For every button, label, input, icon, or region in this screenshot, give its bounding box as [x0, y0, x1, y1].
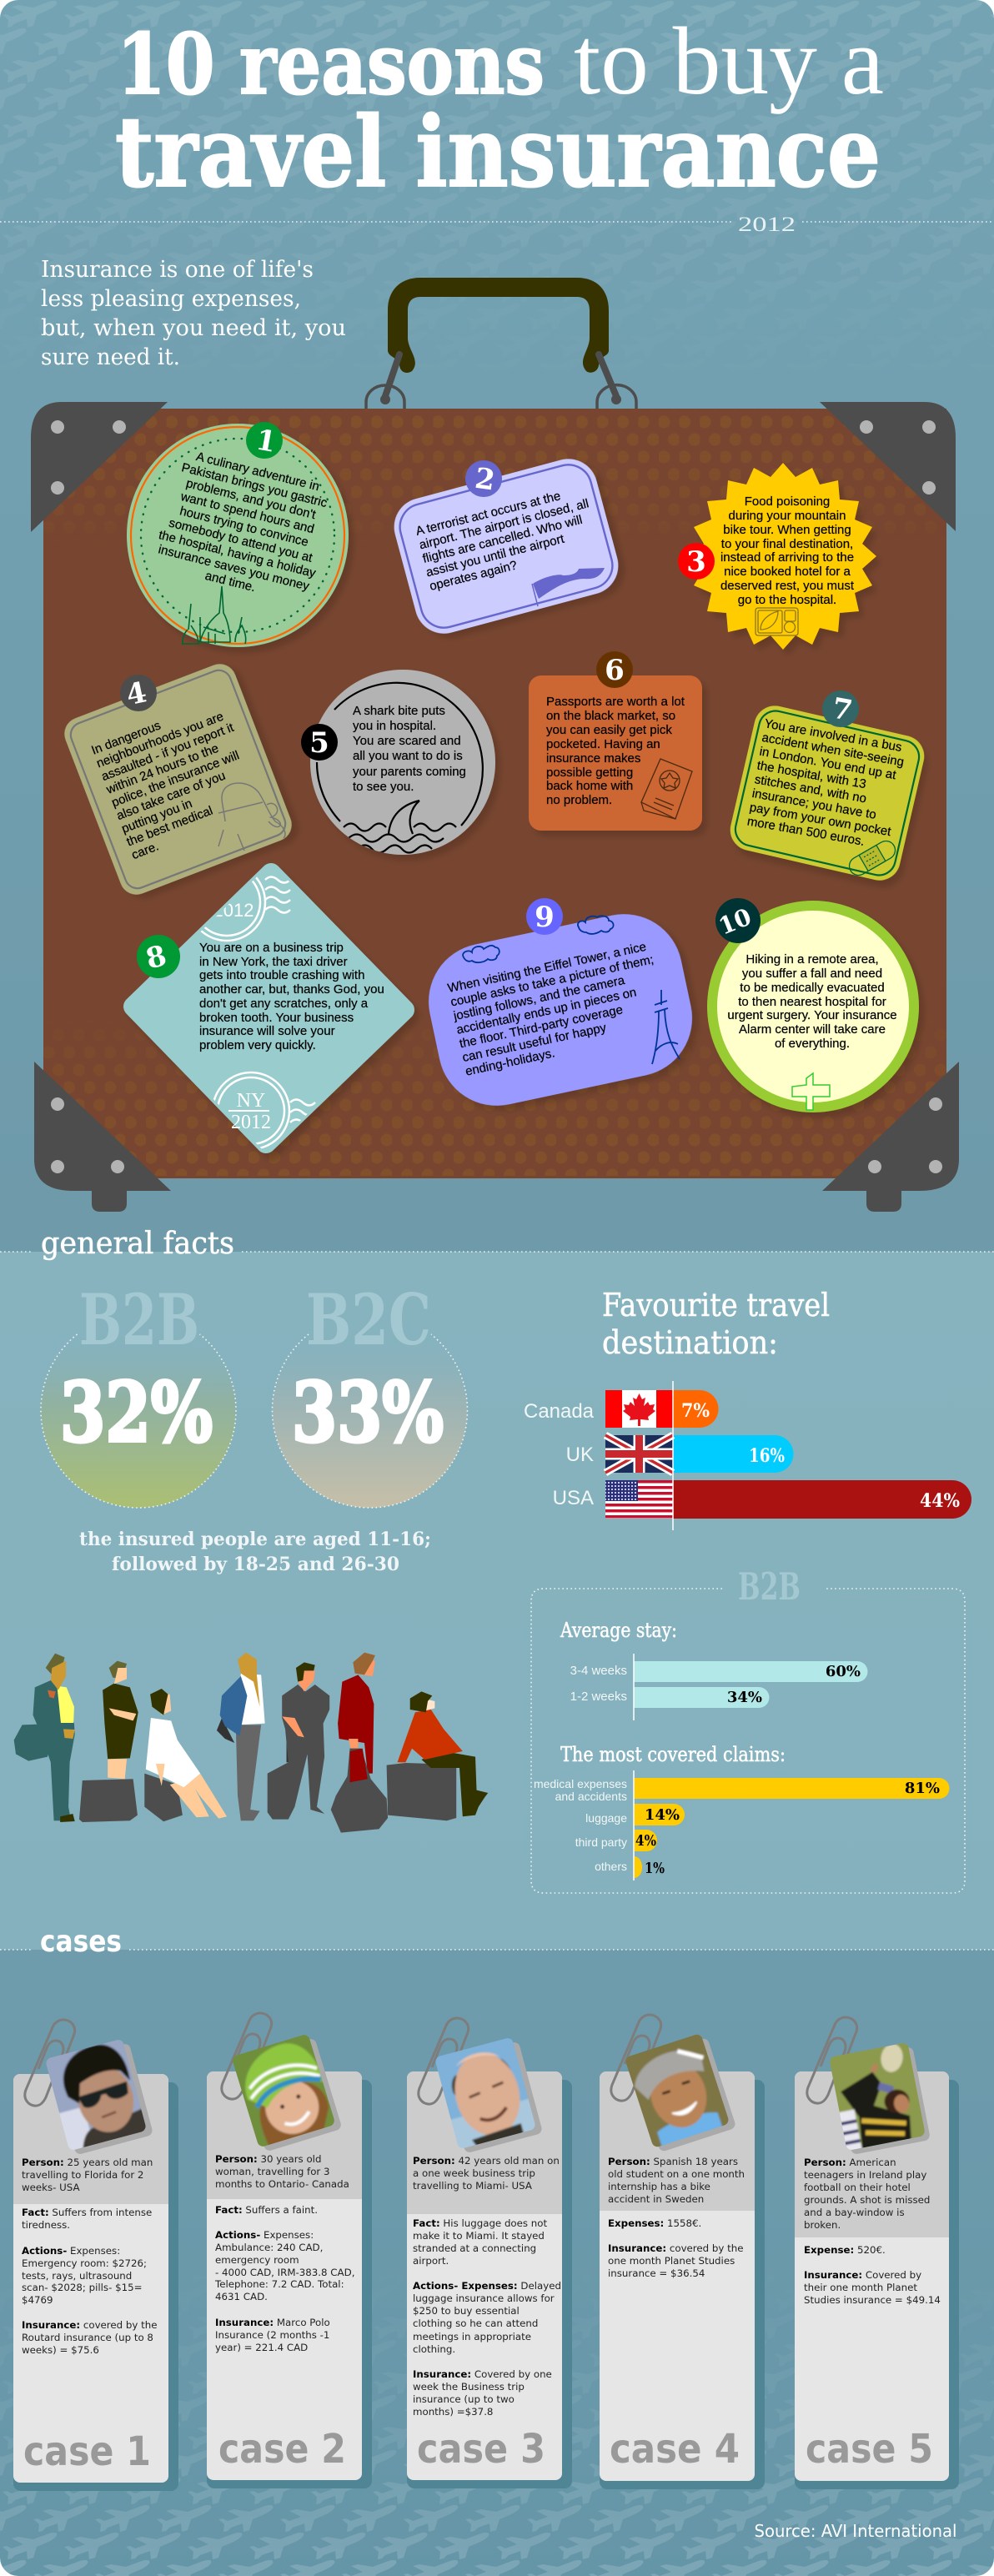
reason 10: hiking: of everything. [775, 1037, 850, 1051]
case 3 text: a one week business trip [413, 2167, 535, 2179]
badge 8: 8 [143, 939, 170, 977]
reason 5: shark bite [301, 670, 495, 855]
reason 10: hiking: Alarm center will take care [739, 1022, 886, 1037]
reason 3: food poisoning [678, 463, 876, 650]
traveller 1 [14, 1654, 75, 1822]
case 1 text: tests, rays, ultrasound [22, 2270, 132, 2282]
reason 3: food poisoning: deserved rest, you must [720, 579, 855, 593]
insured people ages: the insured people are aged 11-16; [79, 1529, 431, 1550]
case 3 text: travelling to Miami- USA [413, 2180, 532, 2192]
average stay chart: 3-4 weeks [570, 1664, 627, 1678]
reason 7: bus accident: the hospital, with 13 [756, 758, 867, 791]
traveller 7 [387, 1691, 488, 1820]
case 5 text: broken. [804, 2219, 841, 2231]
reason 8: taxi crash: in New York, the taxi driver [199, 955, 348, 969]
reason 1: culinary adventure: insurance saves you money [157, 542, 311, 594]
badge 8 [137, 935, 180, 978]
reason 8: taxi crash: gets into trouble crashing with [199, 968, 364, 982]
title [115, 8, 884, 209]
case 5 text: and a bay-window is [804, 2207, 905, 2218]
case 3 text [413, 2155, 561, 2418]
intro text [41, 257, 346, 370]
traveller 6 [331, 1653, 388, 1833]
case 3 text: months) =$37.8 [413, 2406, 493, 2418]
USA row [553, 1480, 971, 1519]
case 2 text: woman, travelling for 3 [215, 2166, 330, 2177]
case 4 text: accident in Sweden [608, 2193, 704, 2205]
reason 4: dangerous neighbourhoods: assaulted - if you report it [99, 721, 236, 784]
intro text: Insurance is one of life's [41, 257, 314, 283]
heading: favourite travel destination: Favourite travel [602, 1287, 830, 1323]
most covered claims chart: and accidents [555, 1790, 627, 1803]
reason 6: passports: no problem. [546, 793, 612, 807]
case 4 text: Insurance: covered by the [608, 2242, 743, 2254]
reason 6: passports: insurance makes [546, 751, 640, 766]
case 3 text: Fact: His luggage does not [413, 2217, 547, 2229]
reason 9: Eiffel Tower [418, 898, 703, 1117]
badge 10: 10 [715, 903, 756, 941]
title: to buy a [574, 8, 884, 115]
reason 4: dangerous neighbourhoods: police, the insurance will [109, 748, 241, 810]
reason 8: taxi crash: problem very quickly. [199, 1038, 316, 1052]
case 5 text: football on their hotel [804, 2182, 911, 2193]
reason 6: passports: you can easily get pick [546, 723, 672, 737]
case 2 text: year) = 221.4 CAD [215, 2342, 308, 2353]
case 1 text [22, 2157, 157, 2356]
USA row: 44% [920, 1490, 960, 1512]
case 5 text: Studies insurance = $49.14 [804, 2294, 941, 2306]
suitcase [31, 278, 959, 1212]
travellers illustration [14, 1653, 488, 1833]
reason 5: shark bite: all you want to do is [353, 749, 463, 763]
reason 8: taxi crash: You are on a business trip [199, 941, 344, 955]
case 2 text: Insurance (2 months -1 [215, 2329, 329, 2341]
case card 1: case 1 [23, 2428, 151, 2475]
reason 5: shark bite: to see you. [353, 780, 414, 794]
reason 4: dangerous neighbourhoods: also take care of you [114, 769, 228, 823]
postmark stamps: 2012 [213, 900, 254, 921]
case 1 text: tiredness. [22, 2219, 70, 2231]
reason 1: culinary adventure: Pakistan brings you gastric [180, 460, 329, 510]
reason 6: passports: back home with [546, 779, 633, 793]
case 3 text: stranded at a connecting [413, 2242, 536, 2254]
case 1 text: Insurance: covered by the [22, 2319, 157, 2331]
average stay chart: Average stay: [560, 1619, 677, 1642]
mosque icon [183, 586, 246, 644]
most covered claims chart: medical expenses [534, 1777, 627, 1790]
paperclip 4 [611, 2015, 661, 2101]
case 1 text: $4769 [22, 2294, 53, 2306]
case 1 text: travelling to Florida for 2 [22, 2169, 143, 2181]
intro text: sure need it. [41, 344, 180, 370]
case 1 text: Person: 25 years old man [22, 2157, 153, 2168]
medical cross icon [792, 1073, 830, 1110]
case 4 text: Expenses: 1558€. [608, 2217, 701, 2229]
case card 5: case 5 [806, 2426, 933, 2473]
case card 4: case 4 [610, 2426, 740, 2473]
case 2 text: Fact: Suffers a faint. [215, 2204, 318, 2216]
reason 4: dangerous neighbourhoods: within 24 hours to the [103, 741, 221, 797]
most covered claims chart: third party [575, 1835, 627, 1849]
reason 7: bus accident: You are involved in a bus [763, 716, 903, 755]
case 2 text: Ambulance: 240 CAD, [215, 2242, 323, 2253]
reason 1: culinary adventure: and time. [203, 569, 257, 595]
case 2 text [214, 2153, 354, 2353]
B2C circle: 33% [292, 1365, 444, 1461]
reason 9: Eiffel Tower: jostling follows, and the camera [451, 973, 626, 1023]
reason 7: bus accident: accident when site-seeing [761, 731, 905, 770]
B2C circle: B2C [306, 1278, 431, 1361]
reason 5: shark bite: you in hospital. [353, 719, 436, 733]
reason 8: taxi crash: 2012 [231, 1112, 271, 1133]
Canada row: 7% [681, 1400, 710, 1422]
paperclip 1 [25, 2020, 75, 2106]
case 4 text: internship has a bike [608, 2181, 710, 2192]
case 5 text: Insurance: Covered by [804, 2269, 921, 2281]
intro text: less pleasing expenses, [41, 286, 301, 312]
badge 2 [465, 460, 502, 498]
reason 3: food poisoning: during your mountain [729, 509, 846, 523]
reason 8: taxi crash: NY [237, 1090, 265, 1112]
reason 4: dangerous neighbourhoods: neighbourhoods you are [94, 710, 226, 771]
UK row: 16% [749, 1445, 785, 1467]
case 1 text: Routard insurance (up to 8 [22, 2332, 153, 2343]
reason 10: hiking: to then nearest hospital for [738, 995, 886, 1009]
reason 7: bus accident: more than 500 euros. [746, 814, 866, 849]
badge 1 [246, 422, 283, 459]
traveller 4 [217, 1653, 265, 1820]
most covered claims chart [534, 1743, 949, 1881]
most covered claims chart: 81% [905, 1780, 940, 1797]
case 1 text: Emergency room: $2726; [22, 2257, 147, 2269]
reason 6: passports [529, 651, 702, 831]
badge 4: 4 [123, 675, 149, 712]
case 5 text: their one month Planet [804, 2282, 917, 2293]
average stay chart: 60% [826, 1663, 861, 1680]
case 5 text: teenagers in Ireland play [804, 2169, 926, 2181]
most covered claims chart: The most covered claims: [560, 1743, 786, 1766]
case card 3: case 3 [417, 2426, 545, 2473]
case 3 text: make it to Miami. It stayed [413, 2230, 545, 2242]
traveller 5 [268, 1662, 329, 1820]
USA row: USA [553, 1487, 594, 1509]
reason 7: bus accident: pay from your own pocket [749, 801, 893, 839]
reason 8: taxi crash: broken tooth. Your business [199, 1011, 354, 1025]
heading: general facts: general facts [41, 1227, 234, 1261]
destination bar chart [524, 1381, 971, 1530]
badge 2: 2 [473, 462, 497, 498]
case 2 text: - 4000 CAD, IRM-383.8 CAD, [215, 2267, 354, 2278]
reason 2: terrorist act [388, 452, 625, 640]
case 5 text: Expense: 520€. [804, 2244, 886, 2256]
reason 3: food poisoning: go to the hospital. [738, 593, 836, 607]
average stay chart: 1-2 weeks [570, 1690, 627, 1704]
badge 7: 7 [830, 691, 855, 728]
case 1 text: Actions- Expenses: [22, 2245, 120, 2257]
bandage icon [846, 837, 898, 879]
reason 4: dangerous neighbourhoods: In dangerous [89, 718, 163, 758]
case 4 text: one month Planet Studies [608, 2255, 735, 2267]
case 5 text: Person: American [804, 2157, 896, 2168]
reason 8: taxi crash [133, 864, 404, 1149]
flag icon [532, 568, 605, 606]
insured people ages: followed by 18-25 and 26-30 [112, 1554, 399, 1575]
photo: man with sunglasses [43, 2036, 153, 2155]
case card 4 [600, 2015, 765, 2489]
case 2 text: Person: 30 years old [215, 2153, 321, 2165]
badge 9: 9 [535, 901, 555, 934]
reason 3: food poisoning: Food poisoning [745, 495, 830, 509]
case card 5 [795, 2017, 959, 2489]
reason 6: passports: Passports are worth a lot [546, 695, 685, 709]
reason 9: Eiffel Tower: accidentally ends up in pieces on [455, 985, 638, 1037]
photo: woman with headscarf [229, 2031, 343, 2152]
case 3 text: clothing so he can attend [413, 2317, 538, 2329]
badge 5 [301, 724, 338, 761]
case 2 text: months to Ontario- Canada [215, 2178, 349, 2190]
reason 1: culinary adventure: hours trying to convince [178, 504, 310, 550]
reason 2: terrorist act: airport. The airport is closed, all [418, 496, 590, 552]
year divider: 2012 [738, 213, 796, 236]
B2B box [531, 1564, 965, 1893]
badge 9 [526, 898, 563, 935]
reason 1: culinary adventure: want to spend hours and [178, 490, 316, 536]
reason 5: shark bite: You are scared and [353, 734, 461, 748]
title: travel insurance [115, 96, 881, 209]
reason 7: bus accident [726, 690, 928, 885]
most covered claims chart: luggage [585, 1811, 627, 1825]
heading: favourite travel destination [602, 1287, 830, 1361]
reason 8: taxi crash: don't get any scratches, only a [199, 997, 369, 1011]
traveller 3 [144, 1689, 227, 1821]
food tray icon [756, 608, 798, 635]
reason 7: bus accident: in London. You end up at [758, 745, 898, 782]
reason 2: terrorist act: A terrorist act occurs at the [414, 489, 562, 539]
reason 7: bus accident: stitches and, with no [753, 772, 867, 806]
B2B circle: 32% [60, 1365, 213, 1461]
source credit: Source: AVI International [754, 2521, 957, 2541]
suitcase corners [31, 402, 959, 1212]
reason 1: culinary adventure: the hospital, having a holiday [157, 528, 318, 580]
reason 9: Eiffel Tower: can result useful for happy [461, 1021, 608, 1065]
case 1 text: weeks- USA [22, 2182, 80, 2193]
case card 1 [13, 2020, 178, 2491]
reason 8: taxi crash: another car, but, thanks God, you [199, 982, 384, 997]
paperclip 2 [222, 2013, 272, 2099]
reason 6: passports: pocketed. Having an [546, 737, 660, 751]
case 5 text: grounds. A shot is missed [804, 2194, 930, 2206]
paperclip 3 [419, 2018, 469, 2104]
reason 3: food poisoning: to your final destination, [721, 537, 853, 551]
case 3 text: clothing. [413, 2343, 455, 2355]
case 4 text [608, 2156, 745, 2279]
reason 1: culinary adventure [127, 422, 349, 647]
case 3 text: week the Business trip [413, 2381, 525, 2393]
reason 4: dangerous neighbourhoods: putting you in [119, 796, 194, 836]
reason 10: hiking: you suffer a fall and need [742, 967, 882, 981]
Canada row [524, 1390, 719, 1428]
heading: cases: cases [40, 1925, 122, 1959]
reason 2: terrorist act: flights are cancelled. Who will [421, 513, 584, 566]
badge 6: 6 [605, 654, 625, 687]
case 3 text: luggage insurance allows for [413, 2292, 555, 2304]
UK row [566, 1435, 794, 1473]
photo: bald smiling man [432, 2034, 543, 2153]
case 3 text: Actions- Expenses: Delayed [413, 2280, 561, 2292]
photo: young man with cap [622, 2030, 736, 2152]
reason 9: Eiffel Tower: the floor. Third-party coverage [458, 1002, 624, 1051]
passport icon [641, 759, 692, 819]
shark fin and waves icon [344, 801, 456, 852]
reason 4: dangerous neighbourhoods [59, 659, 297, 900]
reason 10: hiking: urgent surgery. Your insurance [727, 1008, 897, 1022]
reason 2: terrorist act: assist you until the airport [424, 532, 566, 580]
reason 1: culinary adventure: A culinary adventure in [194, 449, 321, 494]
bandaged head icon [218, 783, 285, 851]
B2B box: B2B [738, 1564, 801, 1609]
badge 6 [596, 651, 633, 688]
most covered claims chart: others [595, 1860, 627, 1873]
intro text: but, when you need it, you [41, 315, 346, 341]
case 3 text: Person: 42 years old man on [413, 2155, 560, 2167]
UK row: UK [566, 1444, 594, 1466]
badge 7 [822, 690, 859, 728]
B2C circle [272, 1278, 468, 1508]
reason 4: dangerous neighbourhoods: the best medical [124, 804, 215, 850]
reason 1: culinary adventure: somebody to attend you at [168, 515, 314, 565]
case 2 text: 4631 CAD. [215, 2291, 268, 2302]
reason 5: shark bite: your parents coming [353, 765, 466, 779]
Canada row: Canada [524, 1400, 595, 1423]
reason 3: food poisoning: nice booked hotel for a [724, 565, 851, 579]
most covered claims chart: 14% [645, 1806, 680, 1824]
case 2 text: Telephone: 7.2 CAD. Total: [214, 2278, 344, 2290]
reason 2: terrorist act: operates again? [428, 558, 519, 594]
average stay chart [560, 1619, 867, 1720]
reason 3: food poisoning: instead of arriving to the [720, 550, 854, 565]
reason 4: dangerous neighbourhoods: care. [130, 839, 161, 862]
reason 10: hiking: Hiking in a remote area, [746, 952, 879, 967]
badge 5: 5 [309, 726, 329, 760]
postmark stamps [200, 876, 316, 1149]
badge 3: 3 [686, 545, 706, 579]
case 2 text: emergency room [215, 2254, 299, 2266]
case 3 text: insurance (up to two [413, 2393, 515, 2405]
B2B circle [41, 1278, 236, 1508]
reason 6: passports: possible getting [546, 766, 633, 780]
badge 4 [120, 675, 157, 712]
case 4 text: insurance = $36.54 [608, 2267, 705, 2279]
case card 2 [207, 2013, 372, 2488]
reason 7: bus accident: insurance; you have to [751, 786, 877, 822]
badge 3 [678, 543, 715, 580]
clouds and tower icons [463, 916, 680, 1064]
traveller 2 [79, 1661, 138, 1822]
case 1 text: Fact: Suffers from intense [22, 2207, 152, 2218]
reason 10: hiking [707, 898, 919, 1112]
case 3 text: meetings in appropriate [413, 2331, 531, 2343]
reason 6: passports: on the black market, so [546, 709, 675, 723]
reason 8: taxi crash: insurance will solve your [199, 1024, 335, 1038]
case 4 text: Person: Spanish 18 years [608, 2156, 738, 2167]
case 3 text: Insurance: Covered by one [413, 2368, 552, 2380]
reason 5: shark bite: A shark bite puts [353, 704, 445, 718]
suitcase body [43, 409, 946, 1178]
reason 10: hiking: to be medically evacuated [740, 981, 885, 995]
case 5 text [804, 2157, 941, 2306]
case 1 text: scan- $2028; pills- $15= [22, 2282, 142, 2293]
title: 10 reasons [117, 15, 545, 113]
case 4 text: old student on a one month [608, 2168, 745, 2180]
reason 9: Eiffel Tower: couple asks to take a picture of them; [449, 952, 655, 1010]
paperclip 5 [807, 2017, 857, 2103]
case 2 text: Actions- Expenses: [215, 2229, 314, 2241]
case 2 text: Insurance: Marco Polo [215, 2317, 330, 2328]
reason 3: food poisoning: bike tour. When getting [723, 523, 851, 537]
heading: favourite travel destination: destination: [602, 1324, 778, 1361]
average stay chart: 34% [727, 1689, 762, 1706]
case 3 text: $250 to buy essential [413, 2305, 520, 2317]
suitcase handle [366, 278, 636, 409]
most covered claims chart: 4% [635, 1832, 656, 1850]
photo: rugby players [826, 2037, 931, 2155]
case card 3 [407, 2018, 572, 2488]
insured people ages [79, 1529, 431, 1575]
reason 1: culinary adventure: problems, and you don't [184, 476, 318, 522]
case card 2: case 2 [218, 2426, 346, 2473]
reason 9: Eiffel Tower: ending-holidays. [464, 1046, 556, 1079]
case 3 text: airport. [413, 2255, 449, 2267]
B2B circle: B2B [79, 1278, 199, 1361]
case 1 text: weeks) = $75.6 [22, 2344, 99, 2356]
most covered claims chart: 1% [645, 1860, 665, 1877]
reason 9: Eiffel Tower: When visiting the Eiffel Tower, a nice [446, 940, 647, 996]
badge 1: 1 [254, 423, 279, 459]
